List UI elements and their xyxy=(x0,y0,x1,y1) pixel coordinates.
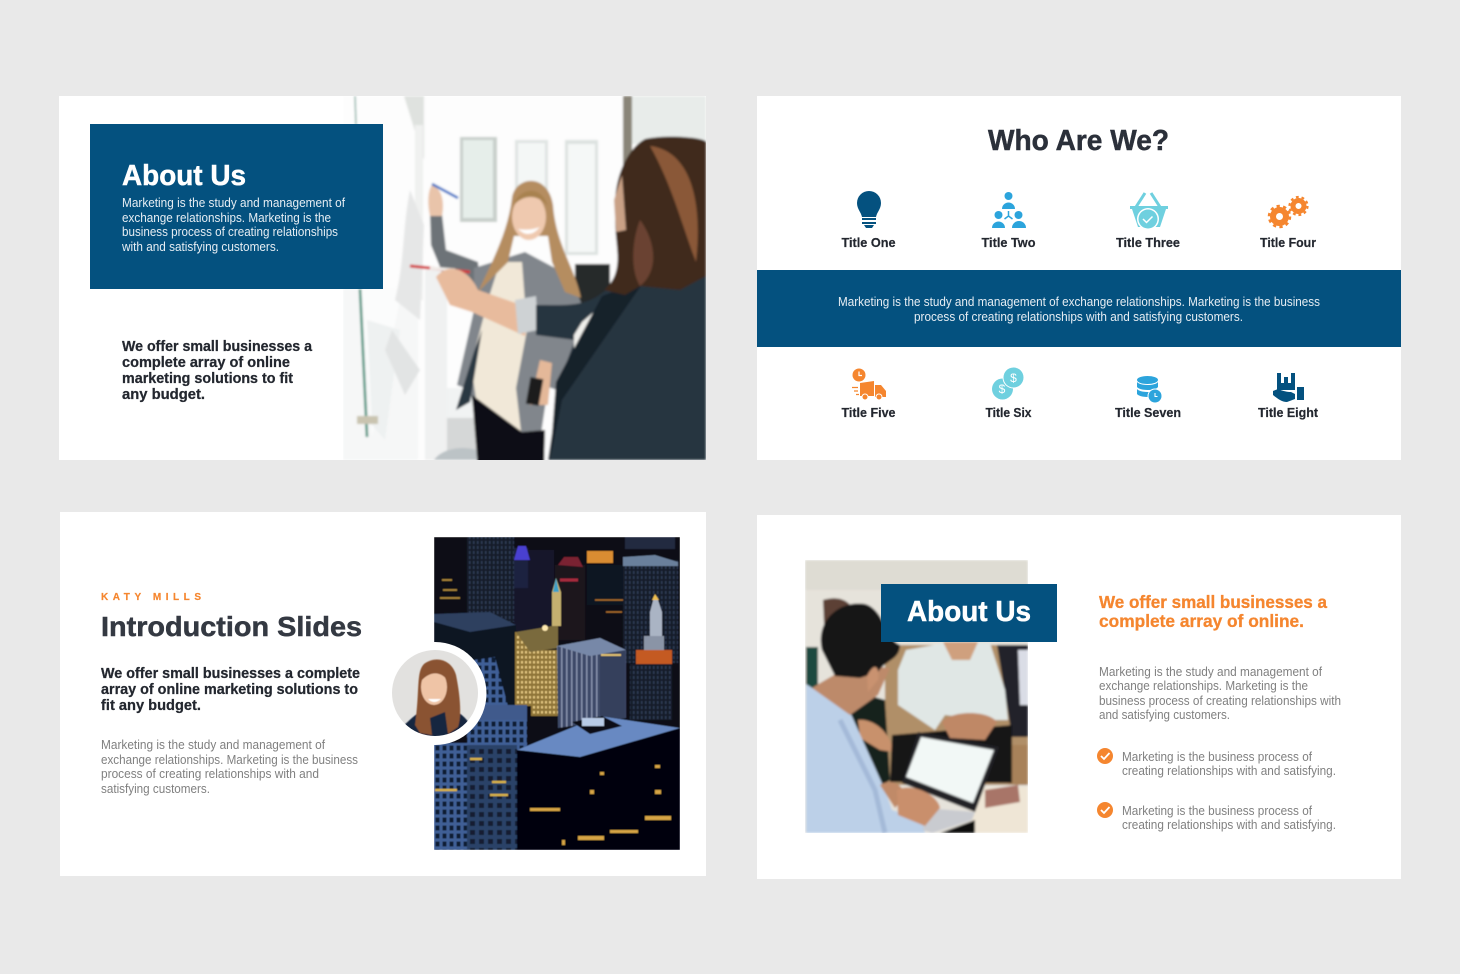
text block: offer statement: We offer small businesses a xyxy=(122,339,313,355)
text block: about us description: with and satisfying customers. xyxy=(121,240,279,254)
text block: offer statement: fit any budget. xyxy=(101,698,201,714)
text block: description: Marketing is the study and management of xyxy=(101,738,325,752)
text block: offer statement xyxy=(122,339,313,403)
text block: list item two: Marketing is the business process of xyxy=(1122,804,1312,818)
text block: list item one: creating relationships with and satisfying. xyxy=(1122,764,1336,778)
text block: description: satisfying customers. xyxy=(101,782,210,796)
text block: list item two xyxy=(1122,804,1336,832)
text block: list item one: Marketing is the business process of xyxy=(1122,750,1312,764)
photo: two women at a whiteboard xyxy=(343,96,706,495)
text block: list item two: creating relationships with and satisfying. xyxy=(1122,818,1336,832)
text block: band description xyxy=(838,295,1320,324)
panel: about us with whiteboard photo xyxy=(59,96,706,495)
heading: about us: About Us xyxy=(907,596,1031,628)
text block: list item one xyxy=(1122,750,1336,778)
label: title seven: Title Seven xyxy=(1115,405,1181,420)
text block: about us description: exchange relationships. Marketing is the xyxy=(122,211,331,225)
photo: city at night xyxy=(434,537,680,850)
icon: shopping basket with check xyxy=(1130,193,1168,230)
label: title two: Title Two xyxy=(982,235,1036,250)
icon: database with clock xyxy=(1137,376,1162,404)
text block: description: exchange relationships. Marketing is the business xyxy=(101,753,358,767)
heading: who are we: Who Are We? xyxy=(988,125,1169,157)
text block: description: process of creating relationships with and xyxy=(101,767,319,781)
text block: about us description: Marketing is the study and management of xyxy=(122,196,345,210)
label: title eight: Title Eight xyxy=(1258,405,1319,420)
panel: who are we xyxy=(757,96,1401,460)
icon: team hierarchy xyxy=(992,192,1026,228)
text block: description: business process of creating relationships with xyxy=(1099,694,1341,708)
text block: description: Marketing is the study and management of xyxy=(1099,665,1322,679)
text block: offer statement: any budget. xyxy=(122,387,205,403)
text block: description: and satisfying customers. xyxy=(1099,708,1230,722)
icon: check two xyxy=(1097,802,1113,818)
blue band xyxy=(757,270,1401,347)
panel: about us with laptop photo xyxy=(757,515,1401,879)
icon: check one xyxy=(1097,748,1113,764)
text block: band description: process of creating relationships with and satisfying customers. xyxy=(914,310,1243,324)
text block: band description: Marketing is the study and management of exchange relationships. Marketing is the business xyxy=(838,295,1320,309)
text block: offer statement: array of online marketing solutions to xyxy=(101,682,358,698)
label: title four: Title Four xyxy=(1260,235,1316,250)
label: title three: Title Three xyxy=(1116,235,1180,250)
text block: offer statement: complete array of online xyxy=(122,355,290,371)
panel: introduction slides xyxy=(60,512,706,876)
icon: coins: $ xyxy=(999,382,1006,396)
text block: offer statement: marketing solutions to fit xyxy=(122,371,293,387)
infographic canvas xyxy=(59,96,1401,879)
heading: introduction slides: Introduction Slides xyxy=(101,611,362,642)
text block: about us description: business process of creating relationships xyxy=(122,225,338,239)
text block: description xyxy=(1099,665,1341,722)
heading: orange offer statement xyxy=(1099,592,1327,631)
foreground woman xyxy=(436,269,530,336)
icon: light bulb xyxy=(857,191,881,228)
heading: orange offer statement: We offer small businesses a xyxy=(1099,592,1327,612)
icon: hand holding boxes xyxy=(1273,373,1304,402)
icon: coins xyxy=(992,366,1024,400)
blue text box xyxy=(90,124,383,289)
heading: about us: About Us xyxy=(122,160,246,192)
icon: delivery truck xyxy=(852,368,886,400)
icon: coins: $ xyxy=(1010,371,1017,385)
heading: orange offer statement: complete array of online. xyxy=(1099,611,1304,631)
label: title five: Title Five xyxy=(842,405,896,420)
text block: description: exchange relationships. Marketing is the xyxy=(1099,679,1308,693)
portrait: circular photo xyxy=(384,642,486,745)
blue title box xyxy=(881,584,1057,642)
photo: team meeting with laptop xyxy=(805,560,1028,833)
text block: about us description xyxy=(121,196,345,254)
text block: offer statement: We offer small businesses a complete xyxy=(101,666,360,682)
label: title six: Title Six xyxy=(986,405,1032,420)
icon: gears xyxy=(1269,197,1308,227)
label: title one: Title One xyxy=(842,235,896,250)
text block: offer statement xyxy=(101,666,360,714)
label: katy mills: KATY MILLS xyxy=(101,592,201,603)
text block: description xyxy=(101,738,358,796)
woman at board xyxy=(428,214,480,284)
